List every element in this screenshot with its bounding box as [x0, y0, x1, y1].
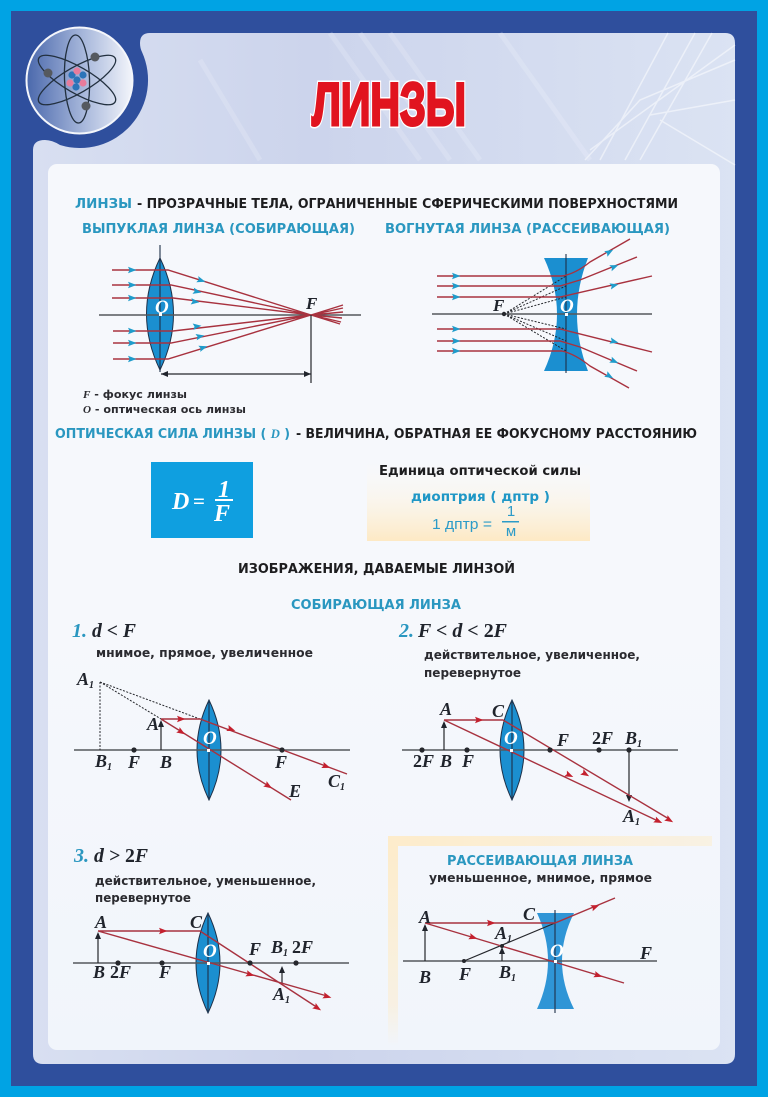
diagram legend: F - фокус линзы — [82, 388, 187, 401]
diagram: concave lens: O — [560, 296, 574, 317]
unit box: диоптрия ( дптр ) — [411, 490, 550, 505]
diverging lens diagram: 1 — [507, 934, 512, 945]
case 2 diagram: F — [556, 730, 569, 750]
definition heading: - ПРОЗРАЧНЫЕ ТЕЛА, ОГРАНИЧЕННЫЕ СФЕРИЧЕСКИМИ ПОВЕРХНОСТЯМИ — [137, 197, 678, 212]
case 2 heading: F < d < 2F — [417, 620, 508, 642]
case 3 diagram: O — [203, 941, 217, 962]
heading: concave lens: ВОГНУТАЯ ЛИНЗА (РАССЕИВАЮЩАЯ) — [385, 222, 670, 237]
case 1 heading: 1. — [72, 620, 87, 642]
case 1 diagram: B — [159, 752, 172, 772]
unit box: м — [506, 523, 516, 540]
diagram legend: O - оптическая ось линзы — [83, 403, 246, 416]
diverging lens diagram: B — [499, 962, 511, 982]
case 1 diagram: F — [127, 752, 140, 772]
case 1 heading: мнимое, прямое, увеличенное — [96, 646, 313, 660]
diagram legend — [82, 388, 246, 416]
formula box: F — [213, 501, 230, 527]
case 1 diagram: E — [288, 781, 301, 801]
case 2 heading: перевернутое — [424, 666, 521, 680]
case 2 diagram: C — [492, 701, 505, 721]
case 2 diagram: A — [623, 806, 635, 826]
optical power definition: ОПТИЧЕСКАЯ СИЛА ЛИНЗЫ ( D ) — [55, 426, 290, 442]
heading: convex lens: ВЫПУКЛАЯ ЛИНЗА (СОБИРАЮЩАЯ) — [82, 222, 355, 237]
diverging lens diagram: A — [495, 923, 507, 943]
optical power definition: - ВЕЛИЧИНА, ОБРАТНАЯ ЕЕ ФОКУСНОМУ РАССТОЯНИЮ — [296, 427, 697, 442]
definition heading: ЛИНЗЫ — [75, 197, 132, 212]
formula box: 1 — [218, 477, 230, 503]
diverging lens diagram: B — [418, 967, 431, 987]
case 1 diagram: A — [77, 669, 89, 689]
white content panel — [48, 164, 720, 1050]
unit box: Единица оптической силы — [379, 464, 581, 479]
panel: diverging lens — [388, 836, 712, 1046]
diagram: convex lens — [99, 245, 361, 383]
case 3 diagram: 2F — [110, 962, 131, 982]
diagram: convex lens: F — [305, 294, 318, 313]
diverging lens diagram: O — [550, 941, 564, 962]
title: ЛИНЗЫ — [312, 71, 466, 138]
case 1 diagram — [74, 669, 350, 801]
case 3 diagram: 1 — [283, 948, 288, 959]
case 3 diagram: A — [94, 912, 107, 932]
title — [312, 71, 466, 138]
diverging lens diagram: C — [523, 904, 536, 924]
case 3 diagram: F — [158, 962, 171, 982]
title: ЛИНЗЫ — [312, 71, 466, 138]
case 1 diagram: C — [328, 771, 340, 791]
case 3 heading — [73, 845, 316, 905]
optical power definition — [55, 426, 697, 442]
case 2 diagram: 1 — [637, 739, 642, 750]
case 3 diagram: A — [273, 984, 285, 1004]
diverging lens diagram — [403, 898, 657, 1013]
properties text: уменьшенное, мнимое, прямое — [429, 871, 652, 885]
case 2 diagram: 2F — [592, 728, 613, 748]
unit box: 1 дптр = — [432, 516, 492, 533]
case 1 diagram: O — [203, 728, 217, 749]
formula box: D — [171, 489, 189, 515]
diagram: concave lens — [432, 239, 652, 388]
diverging lens diagram: F — [458, 964, 471, 984]
formula box — [151, 462, 253, 538]
heading: converging lens: СОБИРАЮЩАЯ ЛИНЗА — [291, 598, 461, 613]
case 1 heading: d < F — [92, 620, 137, 642]
case 2 heading: действительное, увеличенное, — [424, 648, 640, 662]
case 1 diagram: 1 — [107, 762, 112, 773]
case 3 heading: d > 2F — [94, 845, 149, 867]
case 2 heading: 2. — [398, 620, 414, 642]
diagram: convex lens: O — [155, 297, 169, 318]
heading: diverging lens: РАССЕИВАЮЩАЯ ЛИНЗА — [447, 854, 633, 869]
case 2 diagram: F — [461, 751, 474, 771]
diverging lens diagram: A — [418, 907, 431, 927]
case 3 diagram — [73, 912, 349, 1013]
icon: atom — [26, 28, 132, 134]
case 1 diagram: 1 — [89, 680, 94, 691]
case 2 diagram: A — [439, 699, 452, 719]
unit box: 1 — [507, 503, 515, 520]
diagram: concave lens: F — [492, 296, 505, 315]
case 2 diagram: 2F — [413, 751, 434, 771]
heading: images by lens: ИЗОБРАЖЕНИЯ, ДАВАЕМЫЕ ЛИНЗОЙ — [238, 561, 515, 577]
case 1 diagram: B — [95, 751, 107, 771]
case 3 diagram: 2F — [292, 937, 313, 957]
case 3 diagram: C — [190, 912, 203, 932]
case 1 diagram: F — [274, 752, 287, 772]
case 3 diagram: F — [248, 939, 261, 959]
case 3 heading: действительное, уменьшенное, — [95, 874, 316, 888]
case 1 heading — [72, 620, 313, 660]
case 3 diagram: B — [92, 962, 105, 982]
case 3 heading: 3. — [73, 845, 89, 867]
case 2 heading — [398, 620, 640, 680]
case 3 diagram: 1 — [285, 995, 290, 1006]
case 2 diagram: O — [504, 728, 518, 749]
case 2 diagram: B — [625, 728, 637, 748]
formula box: = — [193, 489, 205, 513]
unit box — [367, 458, 590, 541]
case 3 heading: перевернутое — [95, 891, 191, 905]
case 3 diagram: B — [271, 937, 283, 957]
diverging lens diagram: F — [639, 943, 652, 963]
case 2 diagram: 1 — [635, 817, 640, 828]
case 1 diagram: A — [146, 714, 159, 734]
case 2 diagram: B — [439, 751, 452, 771]
case 1 diagram: 1 — [340, 782, 345, 793]
diverging lens diagram: 1 — [511, 973, 516, 984]
case 2 diagram — [402, 699, 678, 828]
